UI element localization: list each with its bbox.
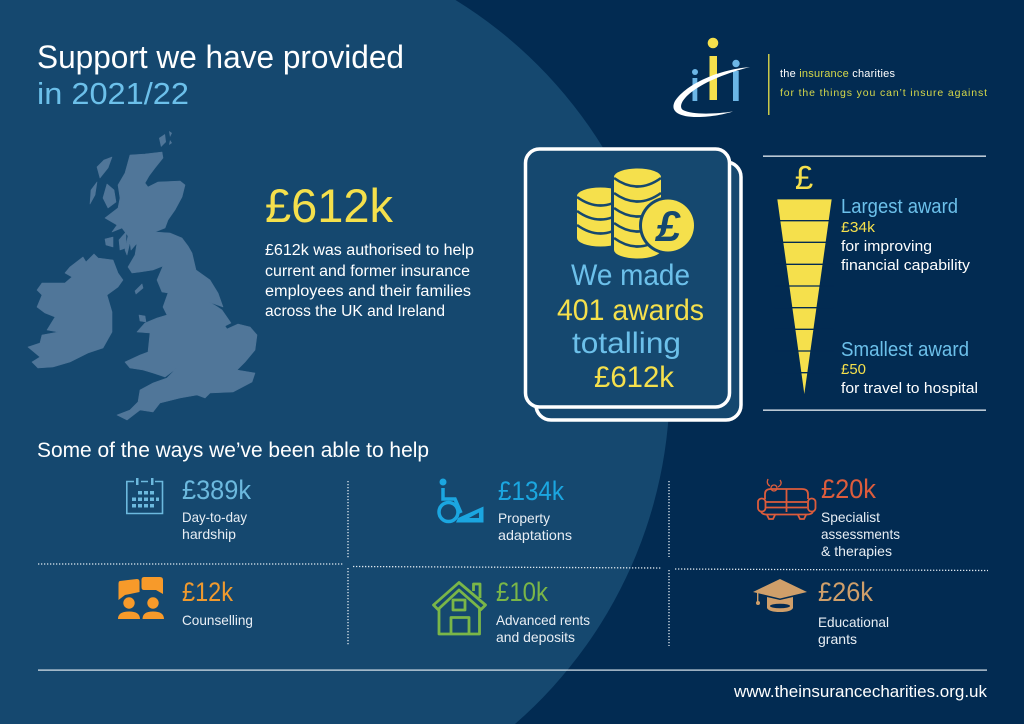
text: smallest award — [841, 339, 978, 397]
item: advanced rents and deposits — [434, 577, 590, 645]
title: Support we have provided — [37, 39, 404, 75]
icon: pound sign: £ — [795, 159, 813, 196]
footer url: www.theinsurancecharities.org.uk — [733, 682, 987, 701]
item: day-to-day hardship: £389k — [182, 475, 251, 505]
text: largest award — [841, 196, 971, 274]
logo: the insurance charities — [673, 38, 987, 117]
text: we made 401 awards totalling £612k: totalling — [572, 327, 681, 360]
item: day-to-day hardship: Day-to-day — [182, 509, 247, 525]
item: advanced rents and deposits: and deposits — [496, 629, 575, 645]
item: property adaptations: Property — [498, 510, 550, 526]
stat: £612k authorised: £612k — [265, 179, 393, 232]
item: specialist assessments and therapies — [758, 474, 900, 559]
stat: £612k authorised: across the UK and Ireland — [265, 303, 445, 320]
text: largest award: for improving — [841, 238, 932, 255]
item: property adaptations: £134k — [498, 476, 564, 506]
text: largest award: financial capability — [841, 257, 971, 274]
item: specialist assessments and therapies: Specialist — [821, 509, 880, 525]
item: property adaptations — [439, 476, 572, 543]
item: counselling: Counselling — [182, 612, 253, 628]
text: smallest award: for travel to hospital — [841, 380, 978, 397]
item: educational grants: Educational — [818, 614, 889, 630]
item: day-to-day hardship — [127, 475, 251, 542]
map: UK and Ireland — [28, 131, 257, 420]
icon: coins: £ — [654, 203, 681, 251]
text: largest award: £34k — [841, 220, 876, 236]
item: specialist assessments and therapies: & therapies — [821, 543, 892, 559]
item: day-to-day hardship: hardship — [182, 526, 236, 542]
text: we made 401 awards totalling £612k: 401 awards — [557, 294, 704, 327]
text: we made 401 awards totalling £612k: We made — [571, 259, 690, 292]
text: smallest award: £50 — [841, 362, 866, 378]
stat: £612k authorised — [265, 179, 474, 320]
text: we made 401 awards totalling £612k — [557, 259, 704, 394]
icon: sofa with stethoscope — [758, 479, 816, 519]
icon: calendar — [127, 478, 162, 514]
text: we made 401 awards totalling £612k: £612k — [594, 361, 675, 394]
panel: awards card — [526, 149, 741, 420]
icon: coins — [577, 168, 697, 260]
stat: £612k authorised: employees and their families — [265, 283, 471, 300]
item: educational grants: grants — [818, 631, 857, 647]
heading: ways we've helped: Some of the ways we’ve been able to help — [37, 439, 429, 462]
item: specialist assessments and therapies: £20k — [821, 474, 876, 504]
icon: graduation cap — [753, 579, 807, 612]
item: specialist assessments and therapies: assessments — [821, 526, 900, 542]
title: in 2021/22 — [37, 76, 189, 111]
icon: wheelchair — [439, 478, 484, 522]
icon: house — [434, 582, 486, 634]
title — [37, 39, 404, 111]
item: educational grants — [753, 577, 889, 647]
text: largest award: Largest award — [841, 196, 958, 218]
panel: award range — [763, 156, 986, 411]
logo: the insurance charities: the insurance charities — [780, 68, 896, 80]
item: advanced rents and deposits: £10k — [496, 577, 548, 607]
item: property adaptations: adaptations — [498, 527, 572, 543]
text: smallest award: Smallest award — [841, 339, 969, 361]
stat: £612k authorised: current and former insurance — [265, 263, 470, 280]
item: counselling — [118, 577, 253, 628]
chart: award funnel — [775, 199, 833, 394]
stat: £612k authorised: £612k was authorised to help — [265, 242, 474, 259]
item: educational grants: £26k — [818, 577, 873, 607]
item: counselling: £12k — [182, 577, 233, 607]
icon: counselling people — [118, 577, 164, 619]
item: advanced rents and deposits: Advanced rents — [496, 612, 590, 628]
logo: the insurance charities: for the things you can’t insure against — [780, 87, 987, 99]
